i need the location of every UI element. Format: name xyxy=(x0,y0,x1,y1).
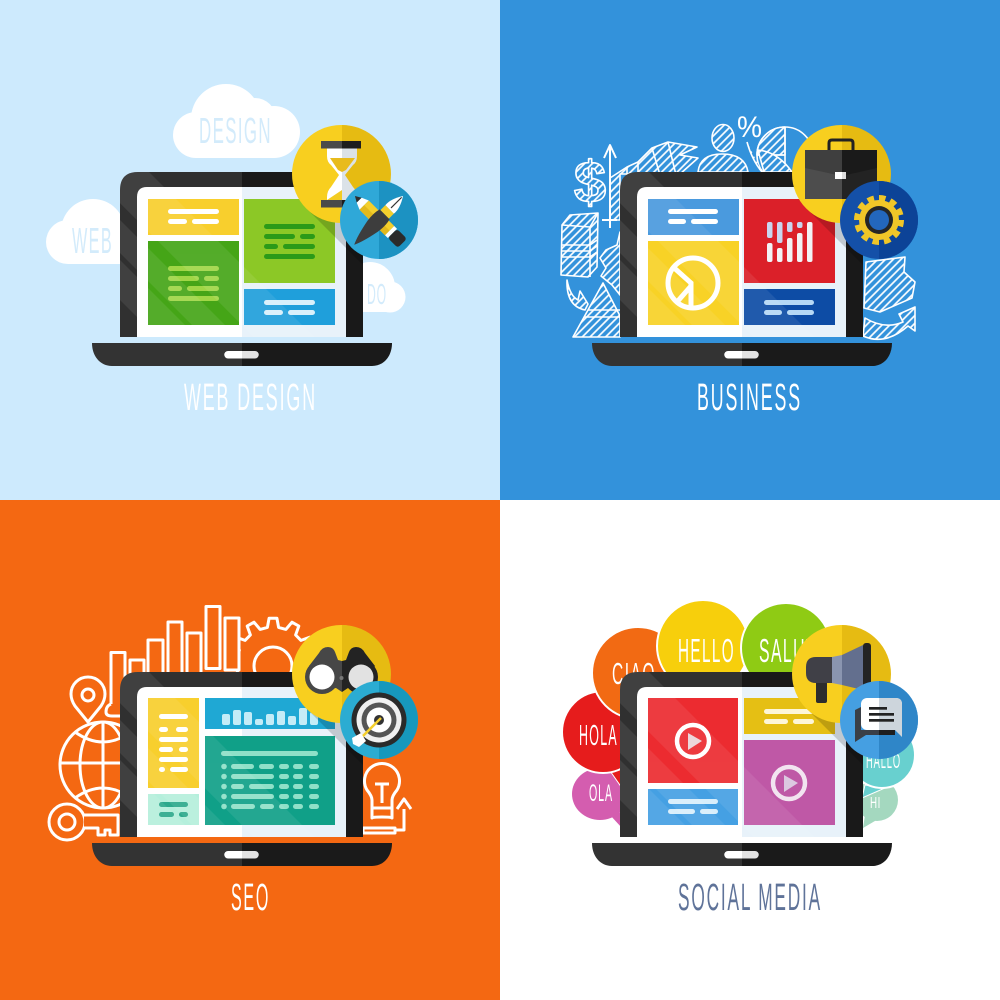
bubble: ola: OLA xyxy=(589,780,613,807)
tile: dark green xyxy=(148,241,239,325)
tile: red bar chart xyxy=(744,199,835,283)
tile: mint xyxy=(148,794,199,825)
bubble: salut: SALUT xyxy=(759,632,817,669)
panel: web design xyxy=(0,0,500,543)
bubble: hola: HOLA xyxy=(579,720,618,752)
icon: megaphone badge xyxy=(792,625,891,723)
tile: blue xyxy=(648,789,738,825)
cloud: web xyxy=(46,199,128,264)
tile: light green xyxy=(244,199,335,283)
tile: yellow list xyxy=(148,698,199,788)
panel: seo: SEO xyxy=(231,877,270,919)
panel: social media: SOCIAL MEDIA xyxy=(678,877,822,919)
panel: seo xyxy=(0,500,500,1000)
cloud: do: DO xyxy=(367,279,387,311)
tile: blue xyxy=(244,289,335,325)
bubble: ciao: CIAO xyxy=(612,656,656,691)
bubble: hello: HELLO xyxy=(678,632,735,669)
laptop frame xyxy=(592,672,892,866)
tile: purple video xyxy=(744,740,835,825)
laptop frame xyxy=(92,172,392,366)
panel: web design: WEB DESIGN xyxy=(184,377,317,419)
icon: gear badge xyxy=(840,181,918,259)
icon: hourglass badge xyxy=(292,125,391,223)
tile: dark blue xyxy=(744,289,835,325)
tile: yellow xyxy=(744,698,835,734)
icon: briefcase badge xyxy=(792,125,891,223)
tile: teal table xyxy=(205,736,335,825)
bubble: hola xyxy=(562,691,644,788)
tile: red video xyxy=(648,698,738,783)
tile: blue bar chart xyxy=(205,698,335,729)
icon: target badge xyxy=(340,681,418,759)
panel: business xyxy=(500,0,1000,543)
doodles: business sketches xyxy=(561,111,915,339)
panel: social media xyxy=(500,500,1000,1000)
bubble: hallo: HALLO xyxy=(866,750,901,773)
cloud: design xyxy=(173,84,300,158)
cloud: web: WEB xyxy=(72,220,113,261)
icon: binoculars badge xyxy=(292,625,391,723)
tile: yellow pie chart xyxy=(648,241,739,325)
panel: business: BUSINESS xyxy=(697,377,802,419)
cloud: design: DESIGN xyxy=(199,110,272,151)
bubble: ciao xyxy=(592,627,684,719)
bubble: ola xyxy=(572,768,628,828)
tile: yellow xyxy=(148,199,239,235)
bubble: hello xyxy=(657,600,749,692)
doodles: seo outlines xyxy=(49,606,411,840)
doodles: business sketches: $ xyxy=(574,150,606,215)
cloud: do xyxy=(345,262,406,312)
bubble: hallo xyxy=(849,722,915,798)
tile: blue header xyxy=(648,199,739,235)
laptop frame xyxy=(92,672,392,866)
laptop frame xyxy=(592,172,892,366)
icon: pencil and pen badge xyxy=(340,181,418,259)
bubble: salut xyxy=(741,603,831,693)
icon: chat badge xyxy=(840,681,918,759)
bubble: hi xyxy=(856,779,898,828)
bubble: hi: HI xyxy=(870,795,881,812)
doodles: business sketches: % xyxy=(737,111,762,144)
